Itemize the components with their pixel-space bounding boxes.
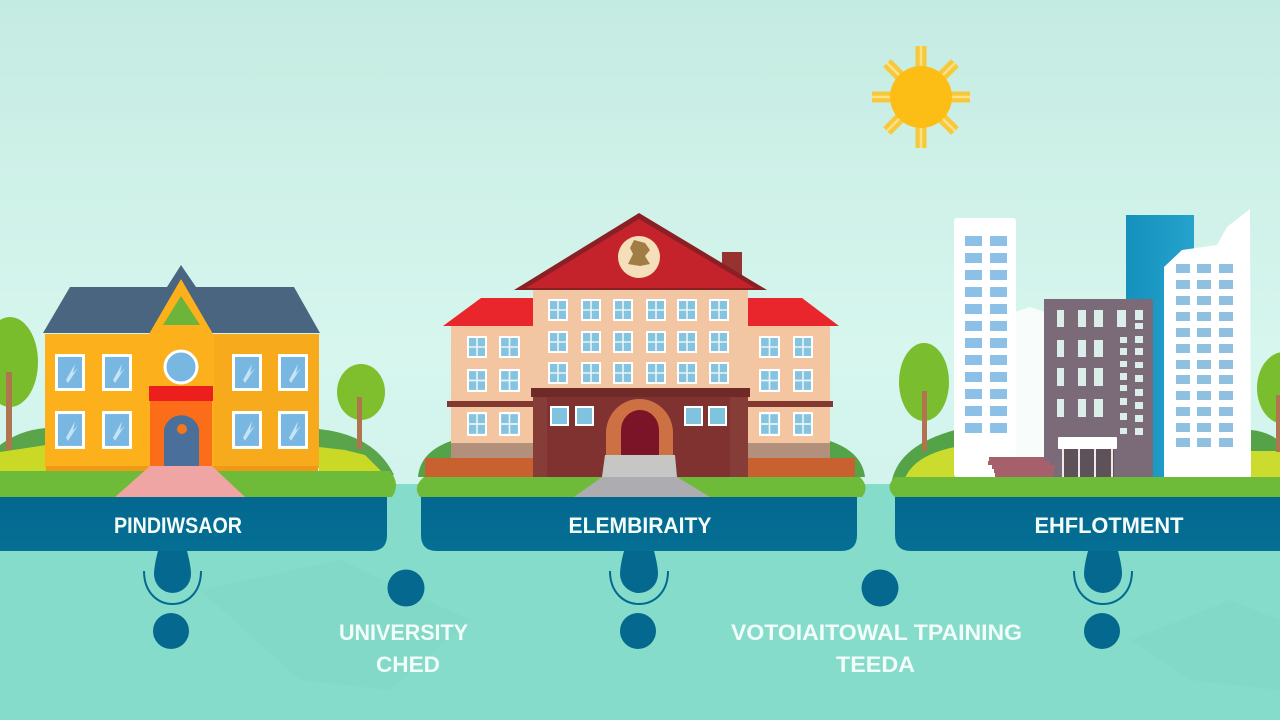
school roof: [43, 265, 320, 333]
panel: employment: [890, 209, 1280, 497]
ground: [890, 477, 1280, 497]
tree left: [899, 343, 949, 451]
school body: [45, 279, 319, 472]
water background: [0, 484, 1280, 720]
school entrance: [149, 386, 213, 466]
medallion: [618, 236, 660, 278]
office canopy: [1058, 437, 1117, 477]
marker: university: [388, 570, 424, 606]
mounds: [892, 430, 1280, 480]
tree right: [337, 364, 385, 449]
banner: first stage: PINDIWSAOR: [114, 513, 242, 538]
white low building: [1015, 307, 1045, 477]
entrance arch: [606, 399, 673, 456]
panel: pre-school: [0, 265, 396, 497]
tree right: [1257, 352, 1280, 452]
central windows: [548, 299, 729, 384]
panel: elementary: [417, 213, 866, 497]
ground, steps and path: [417, 455, 866, 497]
connector: second drop: [610, 551, 668, 649]
connector: third drop: [1074, 551, 1132, 649]
label: university: [339, 620, 468, 677]
label: university: CHED: [376, 652, 440, 677]
school windows: [55, 354, 308, 449]
label: vocational training: VOTOIAITOWAL TPAINING: [731, 620, 1022, 645]
tree left: [0, 317, 38, 450]
marker: vocational training: [862, 570, 898, 606]
entrance windows: [551, 407, 726, 425]
round window: [165, 351, 197, 383]
label: vocational training: [731, 620, 1022, 677]
banner: second stage: [421, 497, 857, 551]
icon: sun: [872, 46, 970, 148]
banner: third stage: [895, 497, 1280, 551]
label: vocational training: TEEDA: [836, 652, 915, 677]
white tower left: [954, 218, 1016, 477]
sky background: [0, 0, 1280, 500]
wing roofs: [443, 298, 839, 326]
label: university: UNIVERSITY: [339, 620, 468, 645]
wing windows: [467, 336, 813, 436]
brick pile: [988, 457, 1055, 477]
banner: second stage: ELEMBIRAITY: [568, 513, 712, 538]
main roof: [514, 213, 767, 290]
banner: first stage: [0, 497, 387, 551]
mounds: [0, 428, 394, 475]
central block: [533, 288, 748, 393]
ground and path: [0, 466, 396, 497]
grey office block: [1044, 299, 1153, 477]
blue tower: [1126, 215, 1194, 477]
mounds: [418, 441, 865, 477]
white tower right: [1164, 209, 1251, 477]
banner: third stage: EHFLOTMENT: [1034, 513, 1184, 538]
brown entrance block: [531, 388, 750, 477]
wings: [425, 326, 855, 477]
connector: first drop: [144, 551, 201, 649]
